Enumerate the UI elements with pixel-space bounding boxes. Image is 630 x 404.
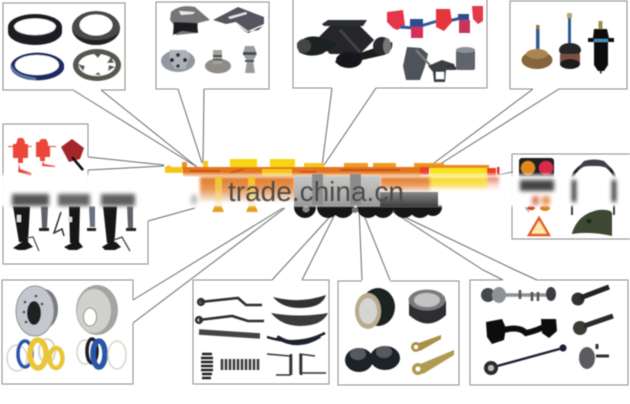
icon: black axle	[486, 319, 557, 344]
icon: warning triangle	[529, 218, 549, 235]
icon: dark red twist lock	[61, 139, 84, 170]
panel: suspension	[293, 0, 487, 88]
icon: steel rim	[16, 286, 58, 336]
icon: fifth wheel top plate	[213, 7, 264, 33]
icon: king pin	[243, 46, 257, 73]
icon: black ring	[8, 14, 62, 45]
panel: brake drums and slack adjusters	[338, 281, 459, 385]
panel: landing gear and hooks	[3, 124, 148, 264]
icon: coil springs	[201, 354, 258, 378]
panel: brake chambers	[510, 1, 627, 89]
icon: tail light	[519, 158, 554, 182]
trailer legs showing through band	[215, 177, 255, 205]
icon: black spring brake chamber	[588, 21, 614, 74]
icon: rear landing legs	[39, 206, 136, 231]
icon: wheel hubs	[345, 346, 400, 372]
icon: king pin cone	[205, 50, 231, 74]
landing feet	[212, 205, 258, 212]
icon: silver rim	[76, 285, 118, 335]
chassis orange beam	[183, 165, 500, 177]
icon: brass brake chamber	[522, 25, 552, 69]
panel: axles	[470, 280, 628, 385]
icon: brake drum	[408, 290, 446, 324]
panel: bearing rings	[3, 3, 125, 90]
panel: leaf springs	[193, 280, 329, 384]
icon: notched grey ring	[73, 49, 121, 81]
chassis yellow pieces	[165, 159, 444, 173]
leader lines	[73, 88, 559, 323]
icon: axle stubs	[572, 287, 613, 369]
icon: landing leg 1	[13, 206, 39, 251]
icon: U-bolts	[267, 354, 326, 375]
icon: brake drum lining	[355, 288, 395, 329]
icon: multi-leaf springs	[267, 295, 328, 343]
icon: landing leg 3	[102, 206, 130, 251]
icon: coloured lock rings	[7, 339, 62, 371]
icon: red twist lock	[8, 138, 32, 176]
icon: hub disc	[161, 50, 195, 72]
icon: leaf spring arms	[196, 298, 264, 336]
icon: side lights	[525, 205, 550, 212]
icon: dark conical ring	[72, 11, 120, 45]
icon: silver axle	[481, 287, 556, 303]
icon: red and blue air suspension	[387, 6, 483, 38]
icon: slack adjusters	[411, 335, 454, 375]
icon: fifth wheel plate	[170, 6, 210, 35]
grey tyre strip	[294, 174, 438, 207]
panel: wheel rims	[2, 280, 133, 384]
icon: red twist lock small	[36, 139, 56, 167]
watermark text: trade.china.cn	[228, 176, 404, 207]
icon: blue ring	[11, 53, 64, 80]
icon: double brake chamber	[559, 13, 581, 69]
icon: grey air suspension	[403, 47, 475, 82]
panel: fifth wheel and king pins	[156, 2, 269, 89]
icon: bogie suspension	[297, 20, 392, 68]
icon: landing leg 2	[54, 206, 83, 250]
trailer body showing through band	[200, 177, 499, 201]
grey watermark blur strips	[12, 180, 616, 206]
icon: long axle beam	[484, 344, 567, 375]
watermark band	[0, 172, 630, 208]
icon: green mudguard	[572, 210, 612, 236]
trailer chassis	[165, 159, 500, 218]
panel: lights and fenders	[512, 154, 630, 239]
icon: fender arch	[572, 160, 615, 215]
tyres	[294, 196, 442, 218]
icon: blue lock rings	[77, 339, 126, 369]
